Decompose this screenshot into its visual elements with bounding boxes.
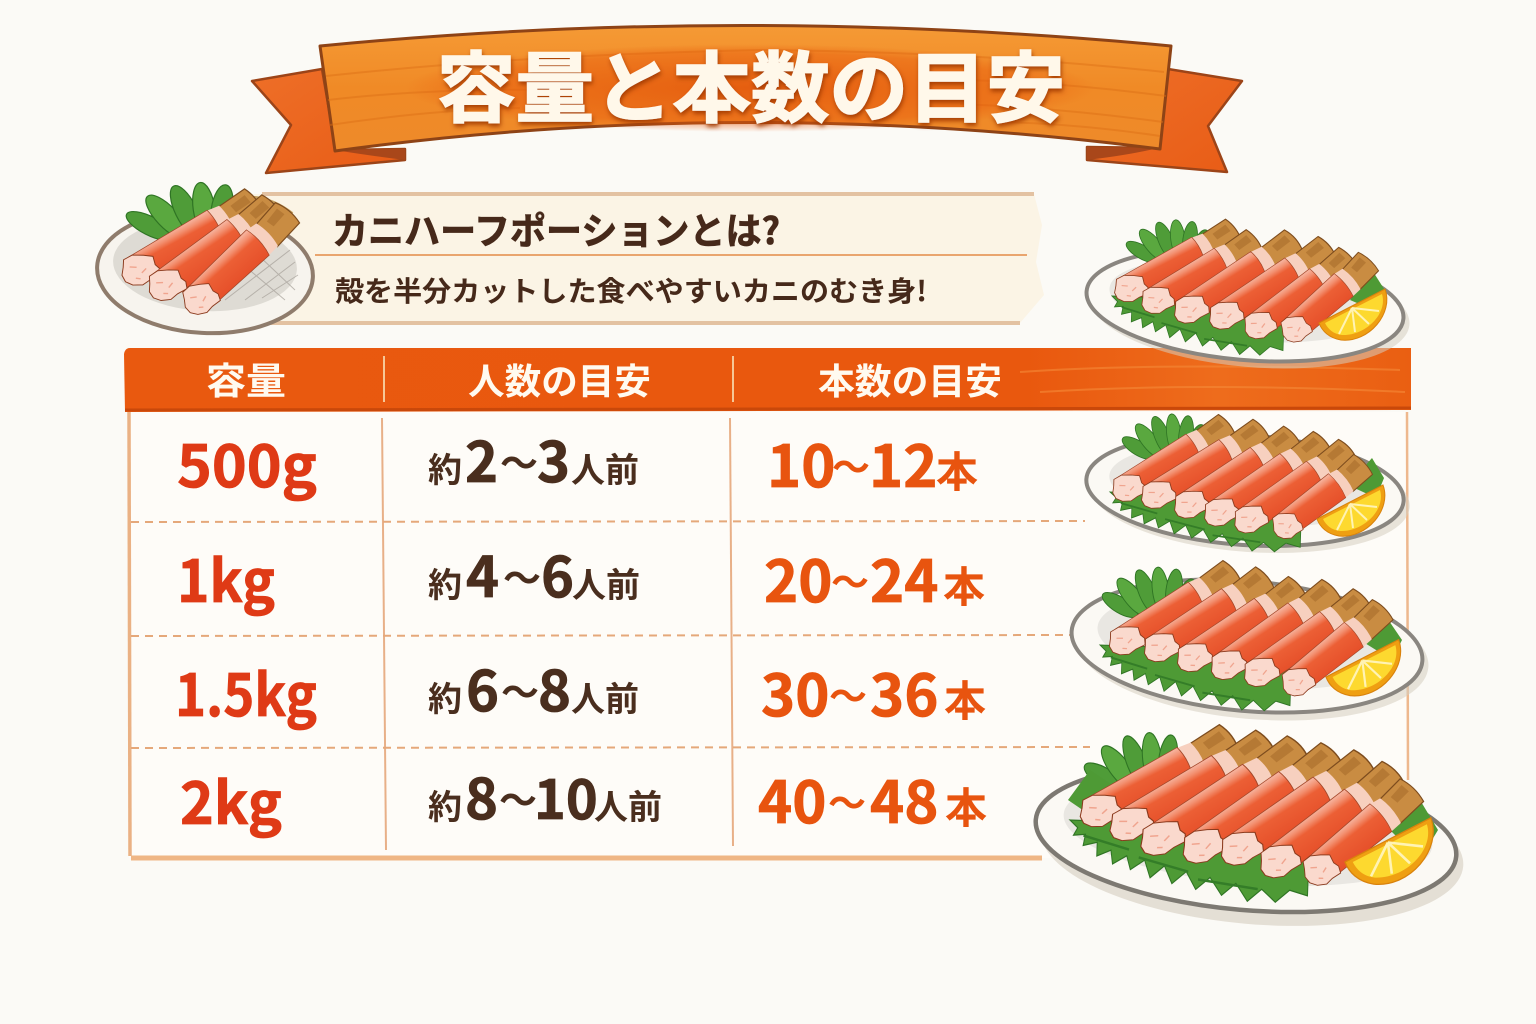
column: servings values: 人前	[571, 672, 639, 721]
column: servings values: ～	[503, 548, 541, 603]
column: count values: ～	[828, 773, 866, 828]
column: count values: 10	[767, 420, 835, 504]
column: servings values: 3	[537, 418, 570, 499]
title banner	[252, 26, 1242, 173]
title glow	[405, 44, 1095, 132]
column: count values: ～	[831, 552, 869, 607]
table header	[124, 348, 1411, 412]
column: servings values	[428, 418, 662, 836]
column: count values: 本	[936, 439, 978, 500]
column: capacity values: 1kg	[177, 535, 275, 619]
ribbon fold left	[335, 149, 405, 160]
column: servings values: 6	[541, 533, 574, 614]
column: capacity values: 2kg	[180, 757, 282, 841]
column: servings values: ～	[499, 770, 537, 825]
column: servings values: 約	[428, 780, 462, 829]
header: count: 本数の目安	[818, 353, 1002, 405]
column: count values	[758, 420, 987, 840]
column: servings values: ～	[500, 433, 538, 488]
column: servings values: 約	[428, 558, 462, 607]
column: count values: 30	[761, 649, 829, 733]
column: count values: 20	[764, 535, 832, 619]
icon: plate 2	[1083, 412, 1414, 563]
column: capacity values	[175, 420, 317, 841]
icon: plate 3	[1066, 558, 1434, 734]
column: capacity values: 500g	[177, 420, 317, 504]
column: servings values: 約	[428, 443, 462, 492]
column: count values: 36	[870, 649, 938, 733]
heading: カニハーフポーションとは?	[332, 201, 780, 255]
wood grain	[326, 50, 1166, 136]
column: count values: 48	[870, 756, 938, 840]
column: count values: 本	[945, 775, 987, 836]
column: count values: ～	[832, 437, 870, 492]
table body	[129, 412, 1407, 858]
ribbon fold right	[1087, 147, 1158, 160]
icon: plate 4 (large)	[1030, 722, 1470, 942]
column: count values: 12	[869, 420, 937, 504]
column: servings values: 人前	[572, 558, 640, 607]
row divider lines	[131, 521, 1090, 748]
column: servings values: 8	[465, 755, 498, 836]
icon: plate 1 (top)	[1082, 217, 1414, 381]
column: servings values: 約	[428, 672, 462, 721]
column: servings values: 6	[466, 647, 499, 728]
column: count values: 本	[943, 554, 985, 615]
column: count values: 24	[870, 535, 938, 619]
header: servings: 人数の目安	[468, 353, 651, 405]
wooden board	[320, 26, 1171, 151]
description: 殻を半分カットした食べやすいカニのむき身!	[335, 270, 927, 310]
icon: small crab plate	[94, 181, 316, 339]
title text: 容量と本数の目安	[437, 28, 1065, 139]
column: servings values: 2	[465, 418, 498, 499]
column: count values: ～	[829, 666, 867, 721]
column: servings values: 人前	[571, 443, 639, 492]
column: servings values: 8	[538, 647, 571, 728]
column: servings values: 4	[466, 533, 499, 614]
column: servings values: 10	[534, 756, 598, 835]
column: servings values: 人前	[594, 780, 662, 829]
column: count values: 本	[944, 668, 986, 729]
ribbon tail right	[1087, 69, 1242, 172]
panel: explanation strip	[250, 194, 1044, 323]
header: capacity: 容量	[206, 351, 286, 405]
column: capacity values: 1.5kg	[175, 649, 317, 733]
panel: table	[124, 348, 1411, 858]
ribbon tail left	[252, 69, 405, 173]
column: servings values: ～	[501, 662, 539, 717]
column: count values: 40	[758, 756, 826, 840]
table frame	[129, 412, 130, 856]
column lines	[382, 418, 386, 850]
strip background	[250, 194, 1044, 323]
